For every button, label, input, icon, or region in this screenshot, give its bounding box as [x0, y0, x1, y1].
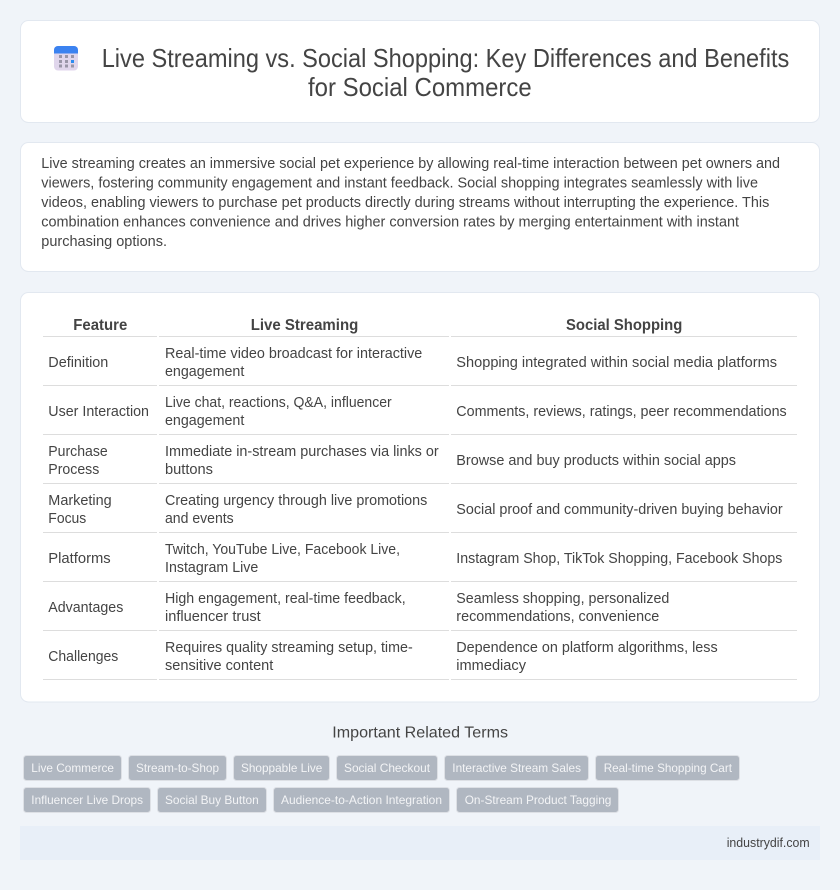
tag: social checkout: Social Checkout [344, 761, 431, 775]
tag: audience-to-action integration [274, 788, 450, 812]
row: advantages: High engagement, real-time feedback, [165, 591, 406, 607]
row: marketing focus: and events [165, 511, 234, 527]
row: challenges: Challenges [48, 649, 118, 665]
row: purchase process [43, 444, 797, 484]
row: platforms [43, 542, 797, 582]
tag: interactive stream sales [444, 756, 588, 780]
row: advantages: recommendations, convenience [456, 609, 659, 625]
row: challenges: Requires quality streaming setup, time- [165, 640, 413, 656]
text block: intro: Live streaming creates an immersive social pet experience by allowing real-time interaction between pet owners and [41, 156, 780, 172]
row: definition: engagement [165, 364, 244, 380]
row: advantages [43, 591, 797, 631]
text block: intro: combination enhances convenience and drives higher conversion rates by merging entertainment with instant [41, 214, 739, 230]
row: platforms: Platforms [48, 551, 111, 567]
tag: live commerce [24, 756, 122, 780]
tag: real-time shopping cart [596, 756, 740, 780]
table header: Social Shopping [566, 317, 682, 334]
row: marketing focus: Focus [48, 511, 86, 527]
row: platforms: Instagram Live [165, 560, 258, 576]
footer: industrydif.com [727, 835, 810, 850]
tag: stream-to-shop: Stream-to-Shop [136, 761, 219, 775]
tag: shoppable live: Shoppable Live [241, 761, 323, 775]
row: marketing focus: Creating urgency through live promotions [165, 493, 427, 509]
row: advantages: Seamless shopping, personalized [456, 591, 669, 607]
tag: on-stream product tagging: On-Stream Product Tagging [465, 793, 611, 807]
row: platforms: Twitch, YouTube Live, Facebook Live, [165, 542, 400, 558]
title: for Social Commerce [308, 74, 532, 102]
tag: real-time shopping cart: Real-time Shopping Cart [604, 761, 733, 775]
row: user interaction: User Interaction [48, 404, 149, 420]
table header: Live Streaming [251, 317, 358, 334]
row: challenges: Dependence on platform algorithms, less [456, 640, 718, 656]
tag: on-stream product tagging [456, 788, 618, 812]
table header: Feature [73, 317, 127, 334]
row: definition [43, 346, 797, 386]
panel: intro paragraph [20, 142, 820, 272]
text block: intro [41, 156, 780, 250]
tag: shoppable live [234, 756, 330, 780]
footer [20, 826, 820, 860]
tag: live commerce: Live Commerce [31, 761, 114, 775]
row: marketing focus [43, 493, 797, 533]
row: purchase process: buttons [165, 462, 213, 478]
table header [43, 317, 797, 337]
row: purchase process: Purchase [48, 444, 108, 460]
tag: stream-to-shop [128, 756, 226, 780]
text block: intro: purchasing options. [41, 234, 167, 250]
row: marketing focus: Marketing [48, 493, 112, 509]
row: advantages: influencer trust [165, 609, 261, 625]
text block: intro: videos, enabling viewers to purchase pet products directly during streams without interrupting the experience. This [41, 195, 769, 211]
row: purchase process: Browse and buy products within social apps [456, 453, 736, 469]
row: definition: Definition [48, 355, 108, 371]
tag: social buy button [158, 788, 266, 812]
tag: audience-to-action integration: Audience-to-Action Integration [281, 793, 442, 807]
row: challenges [43, 640, 797, 680]
tag: influencer live drops [24, 788, 150, 812]
tag: social checkout [336, 756, 438, 780]
row: challenges: immediacy [456, 658, 527, 674]
heading: important related terms: Important Related Terms [332, 724, 508, 742]
title [102, 45, 789, 102]
panel: title header [20, 20, 820, 122]
text block: intro: viewers, fostering community engagement and instant feedback. Social shopping integrates seamlessly with live [41, 176, 758, 192]
row: advantages: Advantages [48, 600, 123, 616]
tag: interactive stream sales: Interactive Stream Sales [452, 761, 581, 775]
row: user interaction: Live chat, reactions, Q&A, influencer [165, 395, 392, 411]
row: definition: Shopping integrated within social media platforms [456, 355, 777, 371]
row: challenges: sensitive content [165, 658, 273, 674]
row: definition: Real-time video broadcast for interactive [165, 346, 422, 362]
panel: comparison table [20, 292, 820, 702]
row: purchase process: Process [48, 462, 99, 478]
row: purchase process: Immediate in-stream purchases via links or [165, 444, 439, 460]
tag: social buy button: Social Buy Button [165, 793, 259, 807]
title: Live Streaming vs. Social Shopping: Key Differences and Benefits [102, 45, 789, 73]
panel: related term tags [24, 756, 740, 812]
row: user interaction [43, 395, 797, 435]
icon: calendar [54, 46, 78, 70]
row: platforms: Instagram Shop, TikTok Shopping, Facebook Shops [456, 551, 782, 567]
row: user interaction: engagement [165, 413, 244, 429]
row: marketing focus: Social proof and community-driven buying behavior [456, 502, 783, 518]
tag: influencer live drops: Influencer Live Drops [31, 793, 143, 807]
row: user interaction: Comments, reviews, ratings, peer recommendations [456, 404, 787, 420]
